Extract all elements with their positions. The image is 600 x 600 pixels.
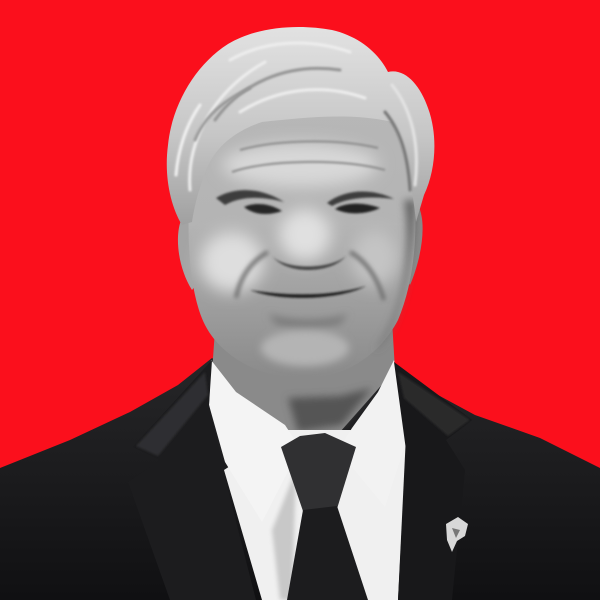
- tie blade: [287, 506, 368, 600]
- tie knot: [281, 433, 356, 514]
- right collar: [338, 360, 405, 507]
- cheek highlights: [200, 143, 399, 292]
- forehead wrinkles: [232, 141, 385, 172]
- hair strands: [176, 43, 416, 190]
- left ear: [178, 218, 200, 290]
- right eye: [327, 192, 394, 213]
- mouth: [250, 286, 366, 298]
- right face shadow: [375, 200, 416, 350]
- left lapel highlight: [136, 372, 208, 456]
- neck: [212, 320, 395, 440]
- suit jacket: [0, 358, 600, 600]
- nasolabial folds: [236, 252, 384, 300]
- right lapel highlight: [398, 372, 470, 436]
- right ear: [400, 205, 423, 285]
- hair: [167, 27, 434, 225]
- shirt: [224, 430, 406, 600]
- chin: [261, 314, 349, 366]
- left eye: [216, 190, 284, 214]
- lapel pin: [446, 517, 468, 552]
- shirt shadow beside tie: [272, 470, 296, 600]
- left lapel: [128, 360, 256, 600]
- neck shadow: [288, 388, 372, 432]
- left collar: [209, 360, 300, 522]
- right lapel: [394, 362, 472, 600]
- nose: [272, 256, 346, 270]
- face: [189, 70, 415, 378]
